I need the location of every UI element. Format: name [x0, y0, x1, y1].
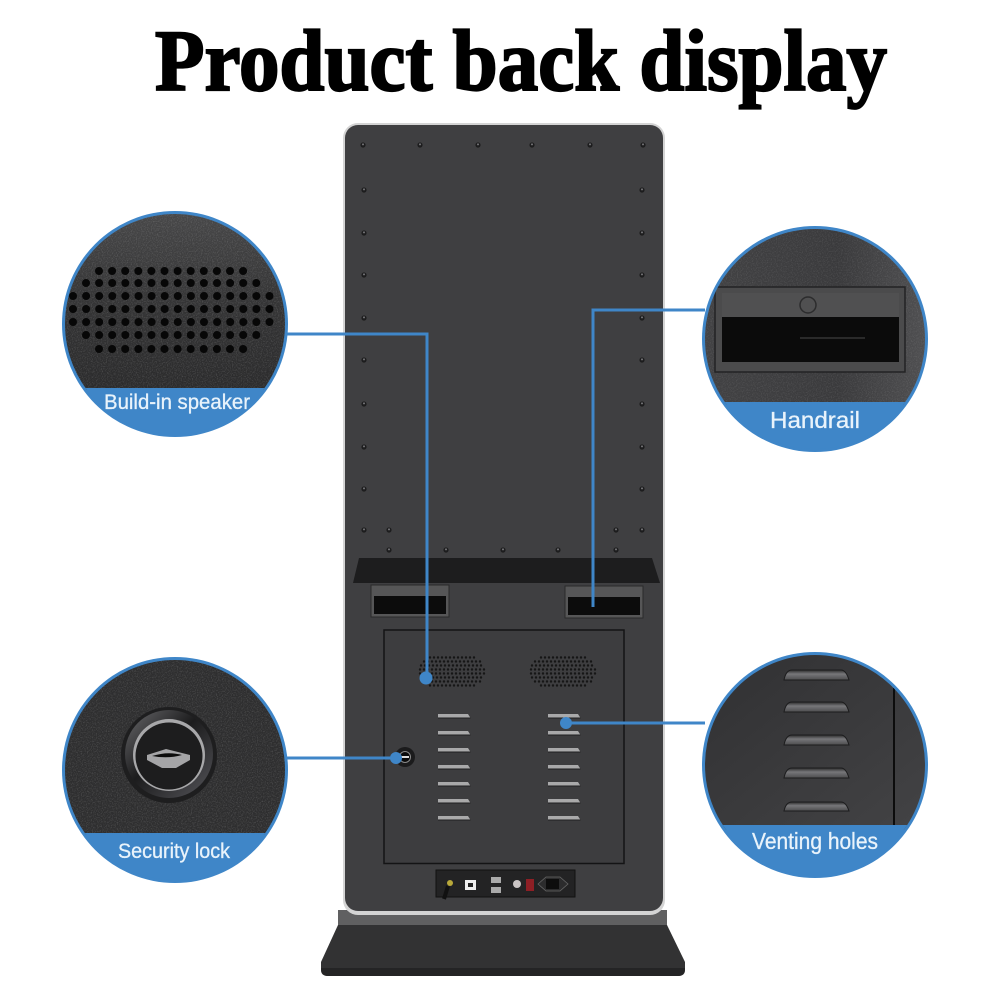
blue label band: [85, 833, 265, 835]
label: Handrail: [770, 407, 860, 433]
panel: security lock: [60, 655, 290, 883]
silver frame: [343, 123, 665, 915]
black shelf: [353, 558, 660, 583]
recycle mark: [800, 297, 816, 313]
connector: handrail: [593, 310, 705, 607]
handle frame: [715, 287, 905, 372]
connector panel: [436, 870, 575, 899]
red power switch: [526, 879, 534, 891]
label: Security lock: [118, 840, 230, 863]
blue label band: [86, 388, 264, 390]
handle recess: [722, 317, 899, 362]
left handle: [371, 585, 449, 617]
round button: [513, 880, 521, 888]
device base: [321, 910, 685, 976]
title: Product back display: [155, 12, 887, 109]
right vent slots: [548, 714, 580, 820]
door lock: [395, 747, 415, 767]
power socket: [538, 877, 568, 891]
door seam: [893, 688, 895, 826]
label: Build-in speaker: [104, 391, 250, 414]
panel: build-in speaker: [60, 210, 290, 438]
usb ports: [491, 877, 501, 883]
power cable plug: [444, 886, 448, 899]
left vent slots: [438, 714, 470, 820]
speaker holes: [73, 271, 272, 349]
lock cylinder: [121, 707, 217, 803]
blue label band: [725, 402, 905, 405]
vent louvres: [784, 670, 849, 811]
panel: venting holes: [700, 650, 930, 880]
left speaker grille: [420, 658, 486, 686]
kiosk device: [321, 123, 685, 976]
right speaker grille: [531, 658, 597, 686]
connector: security lock: [286, 752, 402, 764]
back panel: [345, 125, 663, 911]
network port: [465, 880, 476, 890]
panel screws: [360, 142, 646, 553]
service door: [384, 630, 624, 864]
right handle: [565, 586, 643, 618]
connector: speaker: [286, 334, 432, 684]
connector: venting holes: [560, 717, 705, 729]
blue label band: [723, 825, 907, 830]
label: Venting holes: [752, 828, 878, 854]
panel: handrail: [700, 225, 930, 452]
